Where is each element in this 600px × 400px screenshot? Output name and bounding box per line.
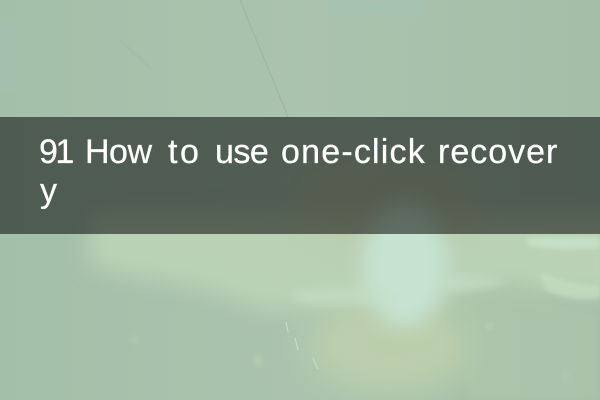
heading: use <box>215 133 268 171</box>
heading: How <box>85 133 152 171</box>
heading <box>39 133 558 210</box>
heading: one-click <box>281 133 426 171</box>
heading: recover <box>438 133 558 171</box>
sky haze above the ridge <box>90 215 600 312</box>
heading: y <box>40 172 57 210</box>
title band <box>0 117 600 234</box>
heading: to <box>168 133 201 171</box>
heading: 91 <box>39 133 72 171</box>
